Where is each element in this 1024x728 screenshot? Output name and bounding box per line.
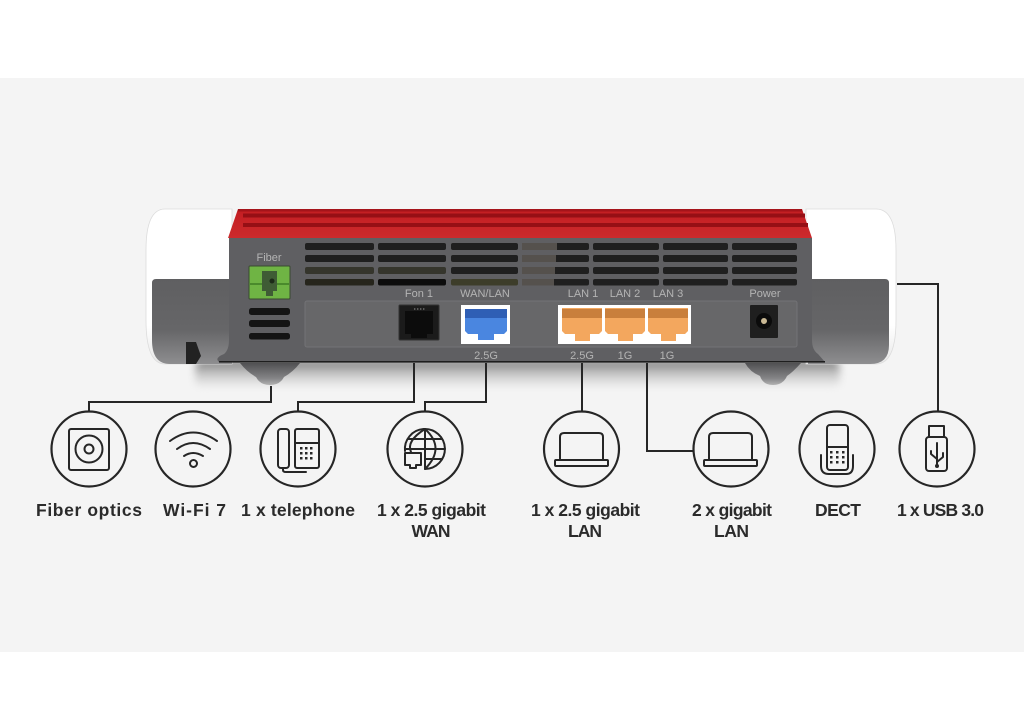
label: gigabit LAN xyxy=(692,500,772,541)
phone port xyxy=(399,288,439,340)
red top cover xyxy=(228,209,812,238)
fiber side slots xyxy=(249,308,290,340)
icon: gigabit LAN laptop xyxy=(694,412,768,486)
power socket: Power xyxy=(749,288,781,300)
WAN port: WAN/LAN xyxy=(460,288,510,300)
label: telephone: 1 x telephone xyxy=(241,500,355,520)
LAN ports xyxy=(558,288,691,362)
icon: WAN globe xyxy=(388,412,462,486)
icon: fiber optics xyxy=(52,412,126,486)
LAN ports: LAN 1 xyxy=(568,288,598,300)
fiber port: Fiber xyxy=(256,252,282,264)
left grey side pad xyxy=(152,279,232,364)
icon: telephone xyxy=(260,412,336,486)
grey rear body xyxy=(217,238,825,362)
label: gigabit LAN: LAN xyxy=(714,521,749,541)
icon: wi-fi xyxy=(156,412,230,486)
fiber port xyxy=(249,252,290,299)
label: USB: 1 x USB 3.0 xyxy=(897,500,984,520)
connector lines xyxy=(89,284,938,451)
label: gigabit LAN: 2 x gigabit xyxy=(692,500,772,520)
right white end cap xyxy=(806,209,896,364)
router xyxy=(146,209,896,388)
port panel xyxy=(305,301,797,347)
label: 2.5 gigabit LAN xyxy=(531,500,640,541)
left foot xyxy=(240,363,300,385)
LAN ports: 1G xyxy=(618,350,632,362)
LAN ports: 2.5G xyxy=(570,350,594,362)
background panel xyxy=(0,78,1024,652)
icon: DECT handset xyxy=(800,412,874,486)
label: fiber optics: Fiber optics xyxy=(36,500,142,520)
LAN ports: 1G xyxy=(660,350,674,362)
label: WAN: WAN xyxy=(412,521,450,541)
right grey side pad xyxy=(808,279,889,364)
router shadow xyxy=(195,360,840,388)
left white end cap xyxy=(146,209,232,364)
icon: 2.5 gigabit LAN laptop xyxy=(544,412,619,486)
icon: USB stick xyxy=(900,412,974,486)
label: WAN xyxy=(377,500,486,541)
power cable clip xyxy=(186,342,201,364)
label: WAN: 1 x 2.5 gigabit xyxy=(377,500,486,520)
WAN port xyxy=(460,288,510,362)
label: DECT: DECT xyxy=(815,500,861,520)
WAN port: 2.5G xyxy=(474,350,498,362)
power socket xyxy=(749,288,781,338)
label: 2.5 gigabit LAN: 1 x 2.5 gigabit xyxy=(531,500,640,520)
LAN ports: LAN 3 xyxy=(653,288,683,300)
label: wi-fi 7: Wi-Fi 7 xyxy=(163,500,226,520)
right foot xyxy=(745,363,801,385)
phone port: Fon 1 xyxy=(405,288,433,300)
ventilation slots xyxy=(305,243,797,286)
label: 2.5 gigabit LAN: LAN xyxy=(568,521,602,541)
LAN ports: LAN 2 xyxy=(610,288,640,300)
